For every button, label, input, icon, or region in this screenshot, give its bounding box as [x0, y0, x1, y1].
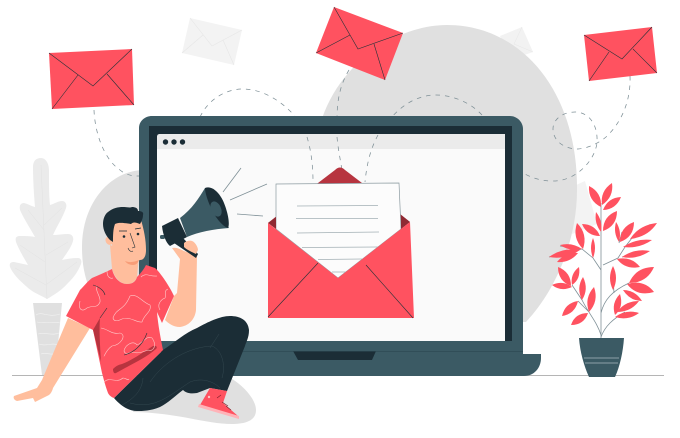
- neck: [110, 245, 139, 284]
- fingers: [184, 241, 198, 254]
- shoe laces: [217, 395, 231, 410]
- front arm and palm: [165, 248, 197, 327]
- browser bar: [157, 134, 505, 149]
- jeans: [114, 316, 249, 411]
- shoe sole: [198, 404, 239, 419]
- eyes: [123, 233, 139, 238]
- envelope inner corners: [268, 215, 410, 229]
- shirt: [66, 265, 174, 398]
- megaphone bell: [205, 187, 229, 228]
- megaphone cone: [180, 188, 229, 237]
- jeans creases: [122, 334, 224, 405]
- envelope front: [268, 222, 414, 318]
- shirt pocket fold: [113, 346, 157, 373]
- leaves: [549, 183, 657, 325]
- laptop base: [230, 352, 541, 376]
- neck shadow: [125, 260, 139, 265]
- dashed flight paths on screen: [307, 135, 378, 182]
- browser dots: [163, 139, 185, 145]
- shirt fold: [93, 285, 147, 355]
- hinge notch: [293, 351, 376, 360]
- face: [105, 220, 146, 263]
- megaphone: [160, 187, 229, 258]
- red envelope: centre top: [316, 7, 403, 80]
- faded envelope: behind plant: [565, 181, 597, 234]
- megaphone handle: [174, 238, 198, 258]
- pot markings: [36, 314, 60, 354]
- shirt sleeve shadow: [93, 318, 101, 362]
- pot: [33, 303, 62, 375]
- background blob: behind person: [82, 170, 142, 294]
- stems: [549, 203, 640, 338]
- person: [14, 187, 249, 419]
- pot bands: [584, 358, 619, 363]
- right plant: [549, 183, 657, 377]
- shirt squiggles: [79, 271, 168, 382]
- megaphone nub: [160, 235, 165, 239]
- hair: [103, 207, 143, 242]
- laptop lid: [139, 116, 523, 352]
- open envelope: [268, 168, 414, 318]
- leaf: [10, 158, 81, 299]
- megaphone sound lines: [223, 168, 267, 216]
- megaphone collar: [162, 218, 187, 246]
- laptop: [139, 116, 541, 376]
- back arm: [14, 318, 90, 402]
- red envelope: right: [584, 27, 657, 81]
- eyebrows: [119, 228, 141, 231]
- background blob: large grey: [320, 25, 577, 322]
- letter lines: [296, 206, 379, 272]
- leaf veins: [15, 165, 77, 299]
- plant pot: [579, 338, 624, 377]
- faded envelope: top centre: [182, 18, 242, 65]
- left plant: [10, 158, 81, 375]
- floor line: [12, 375, 664, 376]
- envelope back flap: [268, 168, 410, 223]
- megaphone driver: [208, 200, 224, 218]
- envelope folds: [268, 263, 413, 318]
- floor shadow blob: [133, 370, 256, 424]
- inner bezel: [149, 126, 512, 341]
- nose and mouth: [128, 233, 135, 251]
- screen: [157, 134, 505, 341]
- dashed flight paths behind laptop: [94, 70, 630, 181]
- shoe: [200, 388, 238, 416]
- red envelope: left: [49, 49, 134, 109]
- letter: [276, 183, 401, 278]
- faded envelope: top right behind blob: [500, 27, 533, 60]
